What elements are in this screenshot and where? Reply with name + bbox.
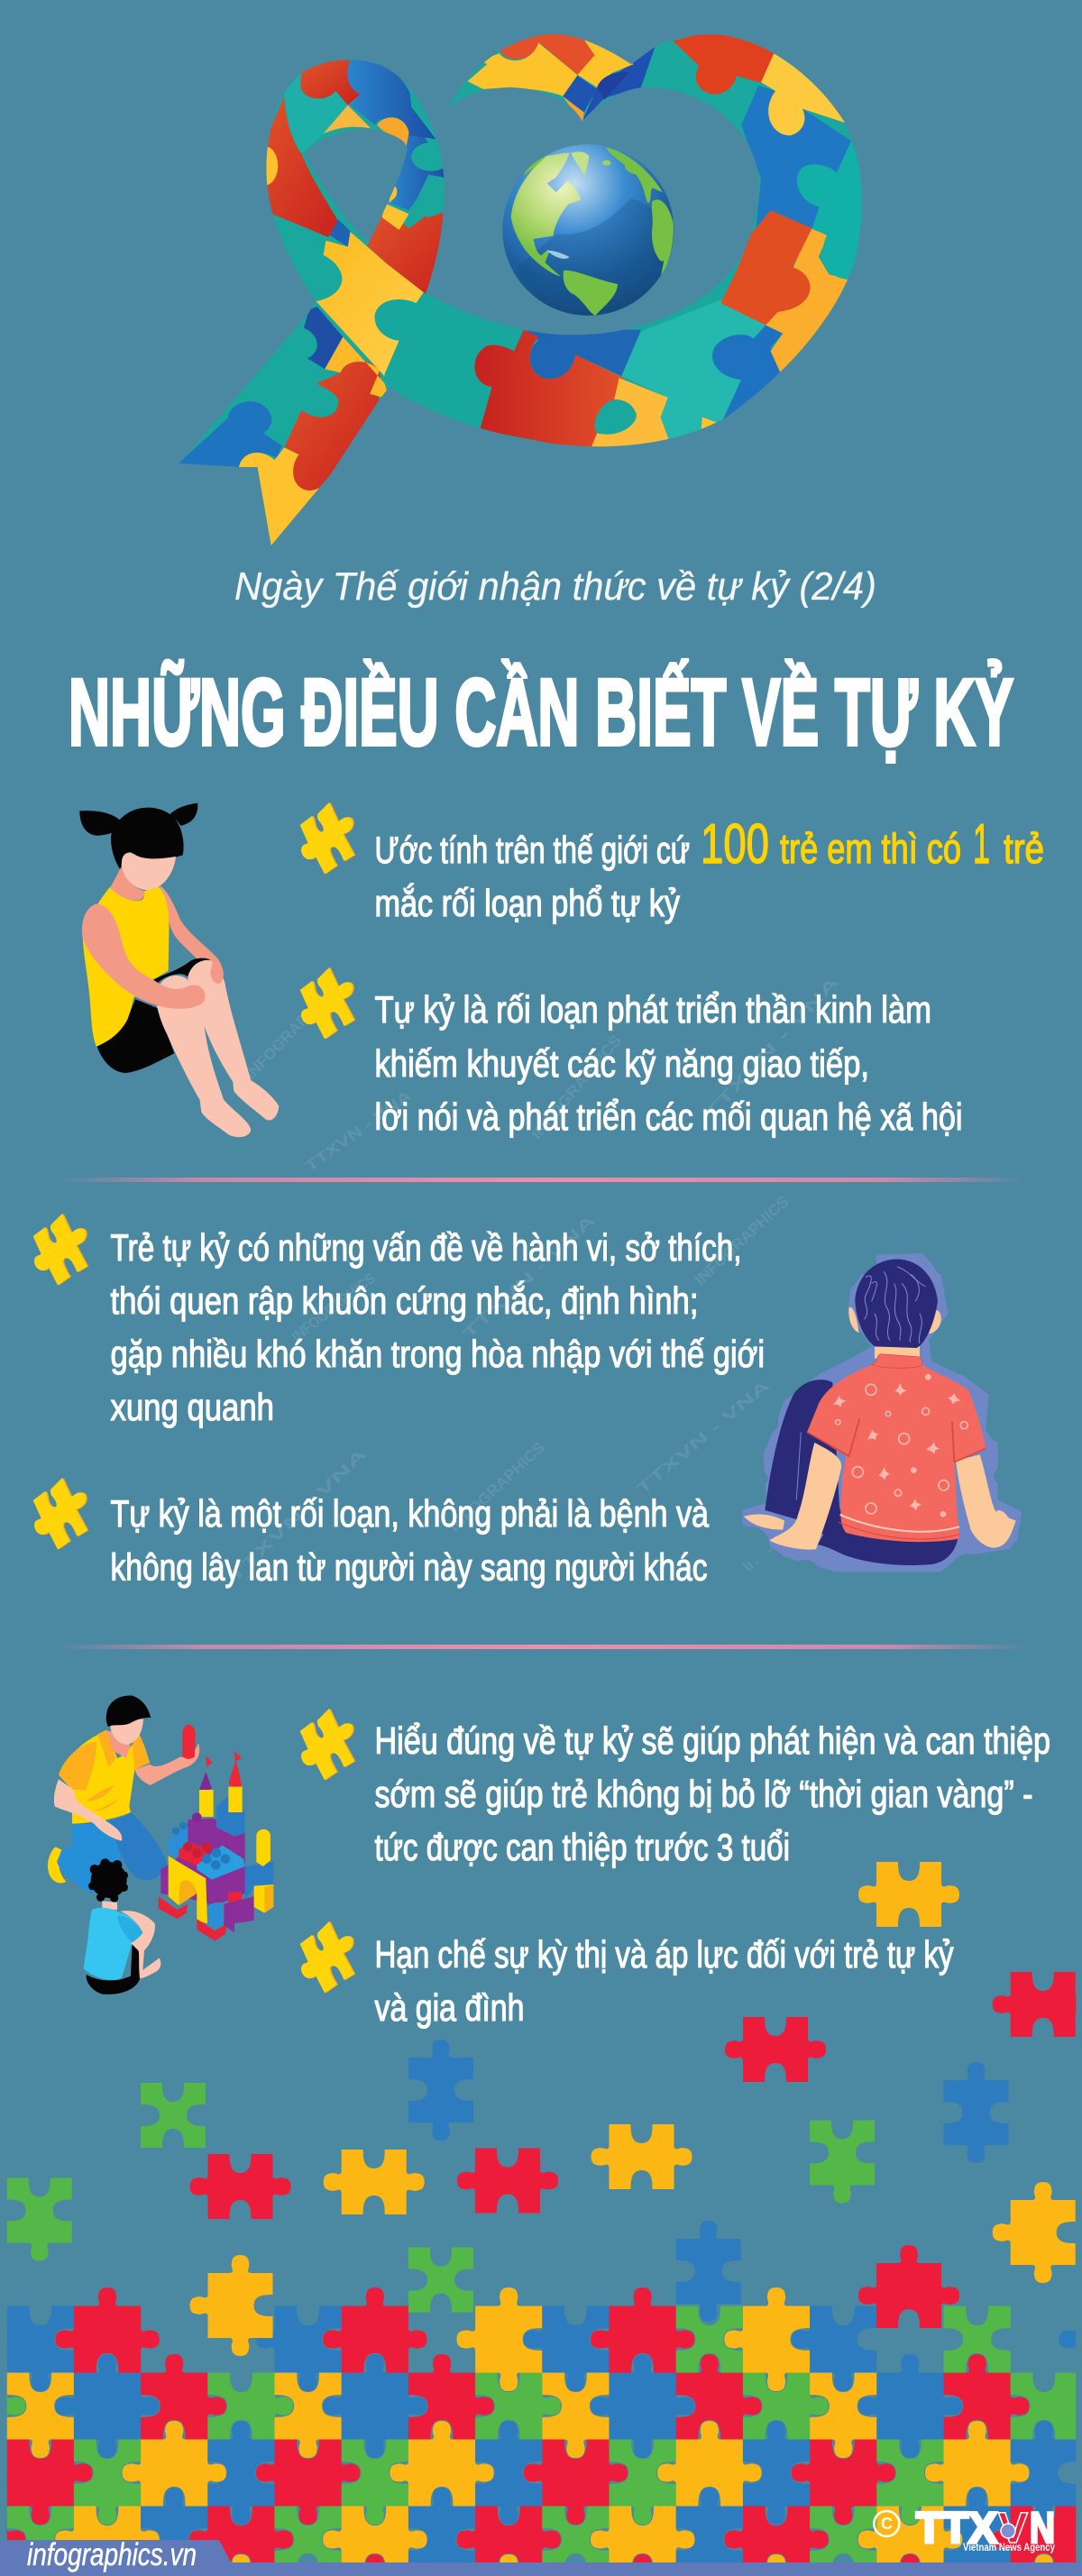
logo: TTXVN: Vietnam News Agency [963,2541,1055,2553]
panel: section 1 [300,802,1044,1138]
icon: puzzle bullet 6 [300,1921,355,1993]
text: behaviour problems: gặp nhiều khó khăn trong hòa nhập với thế giới [110,1333,765,1375]
watermarks: INFOGRAPHICS [242,983,339,1083]
text: neurodevelopmental disorder: Tự kỷ là rối loạn phát triển thần kinh làm [375,988,931,1031]
watermarks: INFOGRAPHICS [289,1270,379,1345]
text: neurodevelopmental disorder: lời nói và phát triển các mối quan hệ xã hội [375,1095,963,1138]
text: 100 children estimate [375,813,1044,924]
text: 100 children estimate: mắc rối loạn phổ tự kỷ [375,882,680,924]
adult figure [48,1696,199,1893]
logo: TTXVN: V [998,2505,1028,2553]
panel: section 2 [33,1214,765,1589]
globe [502,144,674,316]
text: early intervention: tức được can thiệp trước 3 tuổi [375,1826,790,1868]
icon: puzzle bullet 2 [300,967,355,1039]
text: 100 children estimate: trẻ em thì có [780,825,961,872]
watermarks: TTXVN - VNA [633,1377,773,1498]
child figure [84,1858,160,1994]
watermarks: INFOGRAPHICS [528,1031,625,1143]
logo: TTXVN: C [881,2515,893,2533]
logo: TTXVN: N [1030,2505,1055,2553]
text: not a disease: không lây lan từ người này sang người khác [110,1545,707,1589]
text: behaviour problems [110,1226,765,1428]
text: reduce stigma [375,1933,954,2029]
text: not a disease: Tự kỷ là một rối loạn, không phải là bệnh và [110,1492,710,1535]
logo: TTXVN: TTX [916,2505,997,2553]
text: 100 children estimate: 100 [701,813,769,875]
watermarks: INFOGRAPHICS [739,1479,841,1575]
toy block castle [159,1751,273,1941]
watermarks [225,973,842,1586]
icon: puzzle bullet 5 [300,1709,355,1780]
ribbon and globe illustration [179,34,862,545]
text: neurodevelopmental disorder [375,988,963,1138]
text: 100 children estimate: 1 [973,813,990,875]
footer bar [0,2540,1082,2576]
text: behaviour problems: xung quanh [110,1386,274,1428]
illustration: girl sitting [79,803,279,1137]
text: early intervention [375,1719,1050,1868]
watermarks: INFOGRAPHICS [692,1193,792,1288]
text: behaviour problems: thói quen rập khuôn cứng nhắc, định hình; [110,1279,698,1322]
text: 100 children estimate: Ước tính trên thế giới cứ [375,829,690,871]
watermarks: INFOGRAPHICS [446,1439,548,1536]
floating puzzle pieces [7,1862,1082,2356]
watermarks: TTXVN - VNA [302,1087,415,1175]
puzzle wall [0,1862,1082,2576]
text: 100 children estimate: trẻ [1004,825,1044,872]
watermarks: TTXVN - VNA [701,973,842,1123]
watermarks: TTXVN - VNA [225,1445,370,1586]
watermarks: TTXVN - VNA [460,1211,599,1343]
text: behaviour problems: Trẻ tự kỷ có những vấn đề về hành vi, sở thích, [110,1226,741,1269]
illustration: boy sitting from behind [731,1249,1048,1590]
illustration: parent and child with toy blocks [48,1696,273,1994]
footer site label: infographics.vn [27,2537,197,2572]
text: reduce stigma: và gia đình [375,1986,525,2029]
subtitle: Ngày Thế giới nhận thức về tự kỷ (2/4) [234,564,876,609]
puzzle ribbon [179,34,862,545]
icon: puzzle bullet 1 [300,802,355,874]
icon: puzzle bullet 3 [33,1214,88,1285]
text: not a disease [110,1492,710,1589]
icon: puzzle bullet 4 [33,1478,88,1549]
logo: TTXVN [874,2505,1055,2553]
text: neurodevelopmental disorder: khiếm khuyết các kỹ năng giao tiếp, [375,1042,869,1085]
interlocked puzzle grid [0,2287,1082,2576]
panel: section 3 [300,1709,1050,2029]
